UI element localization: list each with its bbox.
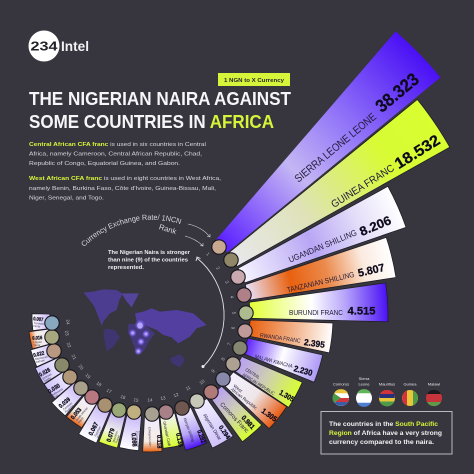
bar 15: Gambian Dalasi: Gambian (135, 431, 140, 448)
bar 19: Zambian Kwacha (51, 381, 88, 416)
rank numbers: 21 (70, 354, 78, 361)
rank numbers: 24 (65, 319, 71, 325)
bar 21: Eritrean Nakfa (35, 356, 69, 384)
bar 16: Mauritian Rupee: Mauritian (111, 430, 119, 443)
bar 15: Gambian Dalasi: Dalasi (138, 431, 142, 441)
title (29, 89, 291, 132)
bar 13: Ghanaian Cedi: 0.135 (174, 432, 184, 448)
flag: Guinea (402, 382, 418, 406)
bar 1: Sierra Leone Leone: 38.323 (372, 69, 423, 116)
badge: 1 NGN to X Currency: 1 NGN to X Currency (224, 78, 285, 84)
bar 17: Egyptian Pound (79, 398, 113, 443)
bar 22: Moroccan Dirham: Moroccan (35, 355, 48, 361)
flag: Malawi: Malawi (428, 382, 440, 386)
title: SOME COUNTRIES IN AFRICA (29, 112, 274, 132)
bar 9: West African Republic (216, 367, 287, 429)
bar 5: Burundi Franc: BURUNDI FRANC (289, 308, 343, 317)
bar 1: Sierra Leone Leone: SIERRA LEONE LEONE (293, 111, 379, 185)
rank numbers: 20 (77, 364, 85, 371)
text block: West African CFA franc (29, 176, 221, 202)
bar 6: Rwanda Franc: 2.395 (303, 337, 326, 350)
bar 24: Tunisian Dinar: Tunisian (34, 321, 45, 326)
bar 15: Gambian Dalasi (119, 405, 144, 451)
rank numbers: 4 (229, 295, 235, 299)
bar 17: Egyptian Pound: 0.067 (88, 421, 100, 437)
arrow: inner arc (196, 257, 224, 368)
bar 13: Ghanaian Cedi: Ghanaian Cedi (162, 421, 172, 446)
bar 12: Kenyan Shilling (173, 401, 207, 451)
bar 24: Tunisian Dinar: Dinar (33, 324, 41, 329)
bar 7: Malawi Kwacha: MALAWI KWACHA (254, 354, 294, 370)
bar 10: Comoros Franc (204, 383, 262, 442)
rank numbers: 22 (66, 342, 72, 349)
bar 5: Burundi Franc: 4.515 (348, 306, 376, 318)
rank numbers: 7 (226, 342, 232, 346)
bar 11: Algerian Dinar: 0.294 (217, 424, 231, 441)
rank numbers: 6 (230, 326, 236, 330)
bar 7: Malawi Kwacha: 2.230 (293, 363, 314, 378)
bar 20: Botswana Pula: Pula (52, 393, 60, 400)
bar 13: Ghanaian Cedi (158, 405, 184, 449)
rank numbers: 9 (210, 368, 216, 374)
rank numbers: 12 (173, 392, 180, 398)
bar 2: Guinea Franc: 18.532 (392, 132, 443, 173)
rank numbers: 2 (215, 266, 221, 271)
bar 11: Algerian Dinar: Algerian Dinar (201, 413, 222, 442)
title: THE NIGERIAN NAIRA AGAINST (29, 89, 291, 109)
badge: 1 NGN to X Currency (218, 73, 290, 86)
bar 20: Botswana Pula: 0.030 (47, 383, 62, 395)
bar 24: Tunisian Dinar: 0.007 (33, 316, 44, 323)
rank numbers: 13 (160, 395, 166, 401)
flag: Mauritius: Mauritius (379, 382, 395, 386)
text block: Central African CFA franc: Republic of Congo, Equatorial Guinea, and Gabon. (29, 161, 180, 167)
bar 17: Egyptian Pound: Egyptian (93, 425, 102, 437)
bar 2: Guinea Franc: GUINEA FRANC (329, 162, 397, 211)
callout: South Pacific region (321, 412, 452, 454)
bar 6: Rwanda Franc: RWANDA FRANC (259, 333, 301, 345)
bar 7: Malawi Kwacha (233, 332, 323, 382)
callout: South Pacific region: Region of Africa have a very strong (329, 430, 442, 437)
callout: naira stronger than nine: The Nigerian Naira is stronger (108, 250, 191, 256)
flag: Comoros (332, 382, 349, 406)
flag: Malawi (426, 382, 442, 406)
bar 18: South African Rand: South African (75, 406, 89, 422)
text block: Central African CFA franc: Central African CFA franc is used in six countries in Central (29, 142, 206, 148)
flag: Sierra Leone (356, 376, 372, 407)
bar 16: Mauritian Rupee (99, 403, 128, 448)
rank numbers: 19 (84, 372, 92, 380)
arrow: rank pointer (185, 236, 203, 246)
bar 1: Sierra Leone Leone (199, 30, 442, 269)
bar 4: Tanzanian Shilling: TANZANIAN SHILLING (286, 270, 355, 294)
bar 20: Botswana Pula: Botswana (51, 387, 64, 397)
bar 22: Moroccan Dirham: Dirham (35, 358, 46, 364)
bar 10: Comoros Franc: Comoros Franc (218, 402, 249, 434)
bar 24: Tunisian Dinar (32, 313, 59, 331)
bar 23: Libyan Dinar (29, 327, 59, 349)
flag: Guinea: Guinea (404, 382, 417, 386)
bar 4: Tanzanian Shilling (237, 237, 397, 312)
bar 8: Central African Republic: 1.305 (278, 388, 296, 404)
bar 21: Eritrean Nakfa: 0.026 (38, 367, 52, 379)
bar 8: Central African Republic: AFRICAN REPUBLIC (241, 372, 276, 396)
curved label: currency exchange rate: Currency Exchange Rate/ 1NCN (82, 214, 182, 246)
callout: naira stronger than nine: than nine (9) of the countries (108, 258, 188, 264)
bar 4: Tanzanian Shilling: 5.807 (357, 262, 386, 280)
text block: Central African CFA franc: Africa, namely Cameroon, Central African Republic, Chad, (29, 152, 202, 158)
bar 19: Zambian Kwacha: 0.039 (58, 397, 72, 410)
rank numbers: 10 (198, 378, 206, 386)
callout: naira stronger than nine (108, 250, 191, 271)
text block: Central African CFA franc (29, 142, 206, 167)
bar 21: Eritrean Nakfa: Eritrean (42, 372, 53, 381)
rank numbers: 16 (120, 394, 127, 400)
bar 23: Libyan Dinar: Dinar (33, 343, 41, 347)
text block: West African CFA franc: namely Benin, Burkina Faso, Côte d'Ivoire, Guinea-Bissau, Mali, (29, 186, 216, 192)
bar 10: Comoros Franc: 0.981 (240, 415, 256, 431)
flag: Comoros: Comoros (333, 382, 349, 386)
bar 22: Moroccan Dirham (30, 342, 61, 367)
bar 15: Gambian Dalasi: 0.098 (130, 433, 138, 447)
bar 3: Ugandan Shilling: UGANDAN SHILLING (287, 227, 358, 265)
bar 14: Ethiopian Birr (142, 407, 162, 452)
rank numbers: 1 (205, 251, 211, 257)
bar 9: West African Republic: African Republic (230, 387, 259, 411)
arrow: exchange rate pointer (188, 224, 210, 237)
callout: naira stronger than nine: represented. (108, 265, 145, 271)
bar 3: Ugandan Shilling: 8.206 (357, 213, 393, 239)
bar 3: Ugandan Shilling (231, 186, 407, 296)
logo: 234 Intel (28, 30, 89, 62)
rank numbers: 11 (185, 385, 192, 391)
bar 18: South African Rand (66, 390, 100, 428)
bar 19: Zambian Kwacha: Zambian (62, 401, 73, 411)
rank numbers: 18 (95, 381, 103, 388)
bar 16: Mauritian Rupee: Rupee (114, 434, 121, 444)
text block: West African CFA franc: Niger, Senegal, and Togo. (29, 196, 104, 202)
bar 11: Algerian Dinar (190, 394, 233, 448)
flag: Sierra Leone: Leone (358, 382, 370, 386)
bar 9: West African Republic: 1.305 (260, 406, 279, 424)
callout: South Pacific region: currency compared to the naira. (329, 439, 434, 446)
bar 18: South African Rand: Rand (77, 416, 85, 424)
world map (83, 289, 207, 367)
callout: South Pacific region: The countries in the South Pacific (329, 421, 438, 428)
bar 14: Ethiopian Birr: 0.118 (155, 435, 162, 449)
bar 6: Rwanda Franc (238, 313, 333, 353)
text block: West African CFA franc: West African CFA franc is used in eight countries in West Africa, (29, 176, 221, 182)
bar 12: Kenyan Shilling: 0.282 (195, 429, 207, 445)
bar 8: Central African Republic (226, 351, 303, 408)
bar 5: Burundi Franc (239, 283, 389, 330)
bar 12: Kenyan Shilling: Kenyan Shilling (183, 417, 196, 442)
rank numbers: 15 (133, 397, 139, 403)
label: rank: Rank (158, 222, 178, 236)
bar 16: Mauritian Rupee: 0.079 (106, 427, 117, 443)
bar 8: Central African Republic: CENTRAL (244, 367, 261, 380)
flag: Sierra Leone: Sierra (359, 376, 370, 381)
logo: 234 Intel: Intel (61, 39, 89, 54)
flag: Mauritius (379, 382, 395, 406)
rank numbers: 23 (64, 330, 70, 336)
bar 19: Zambian Kwacha: Kwacha (64, 404, 75, 414)
rank numbers (64, 251, 236, 403)
rank numbers: 5 (231, 312, 236, 315)
logo: 234 Intel: 234 (30, 40, 58, 54)
bar 22: Moroccan Dirham: 0.022 (33, 351, 45, 359)
bar 17: Egyptian Pound: Pound (96, 429, 103, 439)
bar 2: Guinea Franc (217, 99, 451, 284)
rank numbers: 14 (147, 398, 153, 403)
rank numbers: 17 (106, 388, 113, 395)
bar 21: Eritrean Nakfa: Nakfa (43, 376, 52, 383)
bar 23: Libyan Dinar: Libyan (33, 340, 42, 344)
rank numbers: 8 (220, 356, 226, 361)
bar 14: Ethiopian Birr: Ethiopian Birr (148, 427, 152, 447)
rank numbers: 3 (224, 280, 230, 285)
bar 18: South African Rand: 0.053 (70, 407, 84, 421)
bar 9: West African Republic: West (232, 383, 244, 394)
bar 20: Botswana Pula (44, 369, 77, 400)
bar 23: Libyan Dinar: 0.016 (32, 335, 43, 342)
